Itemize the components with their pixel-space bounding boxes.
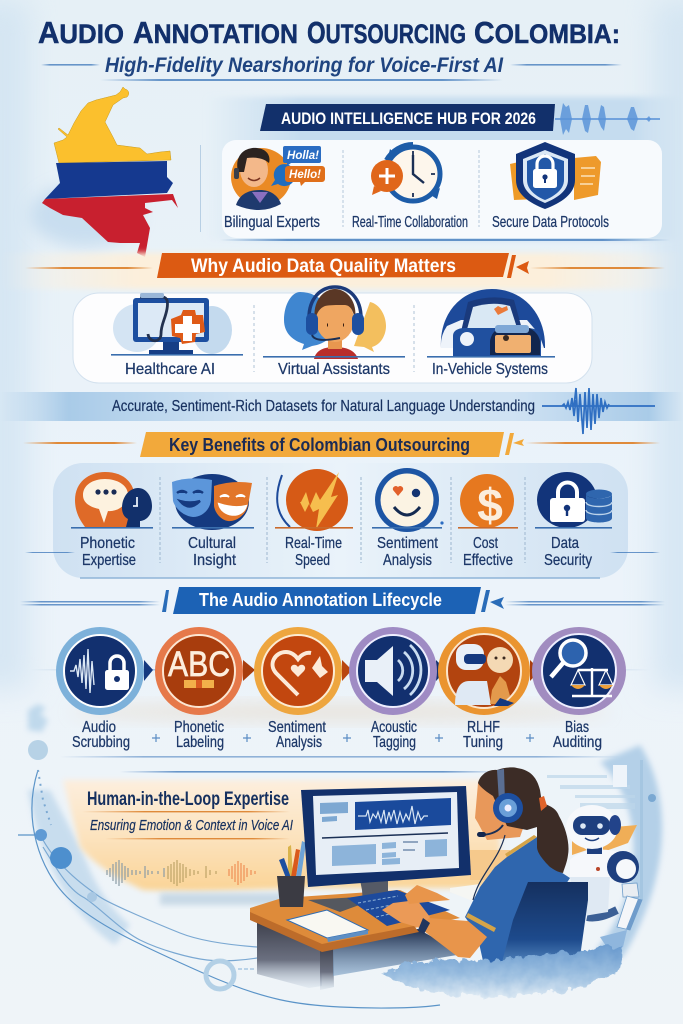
title [38, 15, 620, 50]
step 6 label [553, 719, 602, 751]
panel: key benefits [25, 463, 660, 578]
icon: data security [535, 472, 612, 529]
waveform [555, 103, 660, 135]
subheading: Ensuring Emotion & Context in Voice AI [90, 817, 293, 834]
label: data security [544, 535, 592, 569]
label: cultural insight: Cultural [188, 535, 236, 552]
step 4 label: Tagging [373, 734, 416, 751]
icon: healthcare monitor [111, 293, 243, 356]
label: cultural insight: Insight [193, 552, 237, 569]
icon: cost effective dollar [458, 474, 518, 531]
subtitle: High-Fidelity Nearshoring for Voice-First AI [105, 54, 504, 77]
waveform [107, 860, 255, 886]
label: real-time collaboration: Real-Time Collaboration [352, 214, 468, 231]
book on desk [450, 884, 480, 902]
hub heading banner [260, 104, 555, 131]
heading banner: Why Audio Data Quality Matters [191, 256, 456, 277]
label: real-time speed: Real-Time [285, 535, 342, 552]
step 2: phonetic labeling icon [155, 627, 255, 715]
strip: accurate datasets statement: Accurate, Sentiment-Rich Datasets for Natural Language Understanding [112, 398, 535, 415]
panel: use cases [73, 287, 592, 383]
illustration: annotator at workstation with robot [250, 767, 642, 997]
waveform [542, 388, 655, 434]
step 1 label: Audio [82, 719, 116, 736]
step 5 label: RLHF [467, 719, 500, 736]
step 6 label: Bias [565, 719, 589, 736]
heading banner [157, 253, 509, 278]
step 6 label: Auditing [553, 734, 602, 751]
step 5: RLHF tuning icon [438, 627, 540, 715]
title: ANNOTATION [133, 15, 298, 50]
head [475, 782, 527, 840]
label: virtual assistants: Virtual Assistants [278, 361, 390, 378]
icon: virtual assistant [263, 287, 405, 359]
icon: banner ticks [162, 590, 504, 612]
watercolor wash [380, 947, 624, 997]
icon: bilingual experts [231, 146, 325, 210]
step 3 label: Analysis [276, 734, 322, 751]
label: phonetic expertise: Expertise [82, 552, 136, 569]
step 1 label [72, 719, 130, 751]
icon: banner end tick [507, 255, 529, 278]
panel: audio intelligence hub [200, 97, 683, 241]
label: phonetic expertise [80, 535, 136, 569]
icon: in-vehicle system [427, 289, 555, 358]
label: cost effective: Effective [463, 552, 513, 569]
step 5 label: Tuning [463, 734, 503, 751]
robot [566, 805, 642, 952]
step 1: audio scrubbing icon [56, 627, 153, 715]
heading banner [173, 587, 481, 614]
speech bubble: Holla: Holla! [287, 150, 319, 162]
label: sentiment analysis: Sentiment [377, 535, 438, 552]
wall band behind the person [470, 850, 510, 880]
step 4 label: Acoustic [371, 719, 417, 736]
bottom illustration backdrop [18, 704, 662, 1008]
label: bilingual experts: Bilingual Experts [224, 214, 320, 231]
pen holder [277, 841, 306, 907]
step 5 label [463, 719, 503, 751]
headset [473, 769, 523, 900]
tablet and papers [287, 897, 368, 942]
title: COLOMBIA: [474, 15, 620, 50]
label: cost effective: Cost [473, 535, 498, 552]
chair [500, 882, 588, 970]
speech bubble: Hello: Hello! [289, 169, 321, 181]
icon: real-time collaboration clock [371, 144, 440, 201]
icon: phonetic expertise [71, 472, 153, 529]
sleeve stripe [466, 913, 496, 932]
arm [420, 918, 487, 958]
label: data security: Security [544, 552, 592, 569]
section: lifecycle heading [20, 587, 665, 614]
step 4 label [371, 719, 417, 751]
label: healthcare AI: Healthcare AI [125, 361, 215, 378]
step 3 label: Sentiment [268, 719, 326, 736]
step 2 label: Phonetic [174, 719, 224, 736]
title: AUDIO [38, 15, 124, 50]
label: data security: Data [551, 535, 579, 552]
lifecycle process steps [30, 627, 650, 751]
icon: secure data shield [510, 142, 601, 209]
label: phonetic expertise: Phonetic [80, 535, 135, 552]
keyboard [347, 890, 450, 926]
monitor [301, 786, 471, 904]
section band: why audio data quality matters [0, 253, 683, 289]
label: secure data protocols: Secure Data Protocols [492, 214, 609, 231]
step 6: bias auditing icon [532, 627, 626, 715]
icon: cultural insight masks [172, 474, 254, 530]
step 3: sentiment analysis icon [254, 627, 352, 715]
desk [250, 890, 463, 990]
label: sentiment analysis: Analysis [383, 552, 432, 569]
heading banner: Key Benefits of Colombian Outsourcing [169, 435, 470, 455]
step 3 label [268, 719, 326, 751]
map of Colombia in flag colours [30, 87, 178, 257]
icon: real-time speed [275, 469, 353, 531]
label: sentiment analysis [377, 535, 438, 569]
label: cost effective [463, 535, 513, 569]
icon: cost effective dollar: $ [477, 479, 503, 531]
step 4: acoustic tagging icon [349, 627, 446, 715]
heading: human-in-the-loop expertise: Human-in-the-Loop Expertise [87, 789, 289, 810]
icon: sentiment face [372, 468, 444, 532]
step 2 label [174, 719, 224, 751]
step 1 label: Scrubbing [72, 734, 130, 751]
title: OUTSOURCING [307, 15, 466, 50]
label: real-time speed: Speed [295, 552, 330, 569]
heading banner: The Audio Annotation Lifecycle [199, 590, 442, 610]
label: real-time speed [285, 535, 342, 569]
hub heading banner: AUDIO INTELLIGENCE HUB FOR 2026 [281, 110, 536, 128]
strip: accurate datasets statement [0, 388, 683, 434]
panel: human-in-the-loop [63, 780, 500, 905]
step 2: phonetic labeling icon: ABC [168, 645, 230, 684]
person torso [465, 837, 570, 970]
step 2 label: Labeling [176, 734, 224, 751]
icon: banner end tick [505, 433, 524, 455]
label: in-vehicle systems: In-Vehicle Systems [432, 361, 548, 378]
label: cultural insight [188, 535, 237, 569]
section: key benefits heading [23, 432, 660, 457]
